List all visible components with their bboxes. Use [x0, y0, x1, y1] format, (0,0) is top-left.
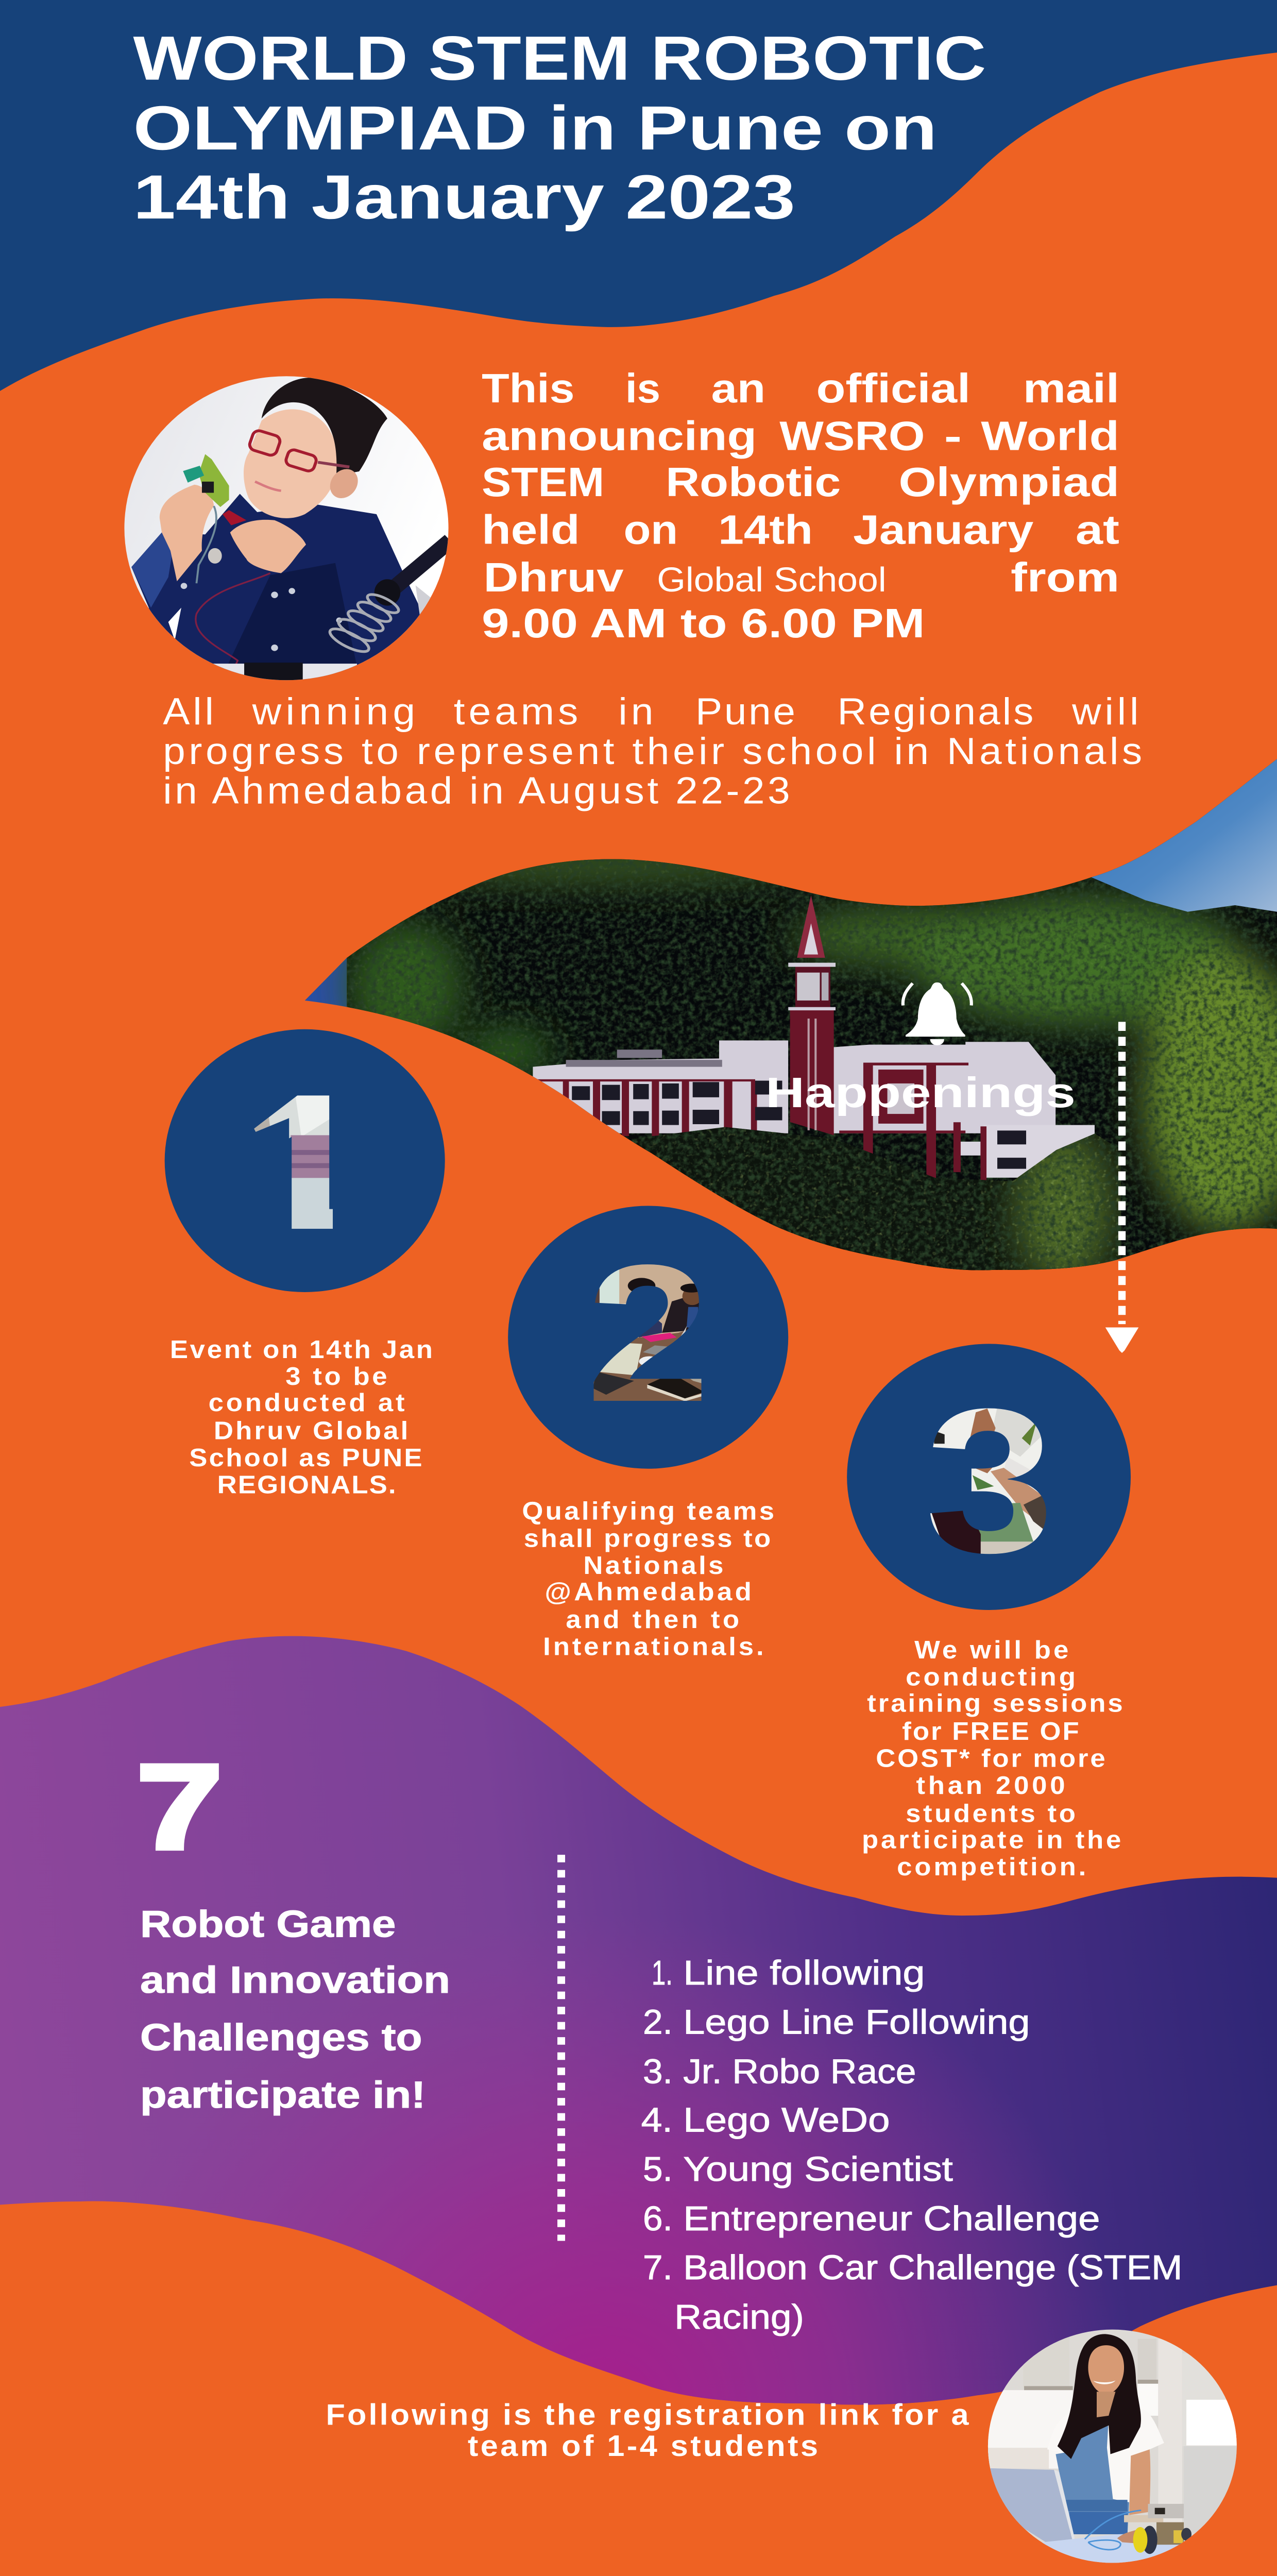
- step 1 caption: [170, 1335, 433, 1499]
- digit 3: [915, 1403, 1060, 1569]
- challenges list: 4.: [641, 2100, 673, 2139]
- sky: [1091, 759, 1277, 912]
- step 3 caption: We will be: [914, 1636, 1068, 1664]
- step 1 caption: conducted at: [209, 1388, 405, 1417]
- intro paragraph: [482, 366, 1119, 647]
- step 1 caption: Dhruv Global: [214, 1416, 408, 1445]
- step 2 caption: @Ahmedabad: [545, 1577, 752, 1606]
- winning teams paragraph: in Ahmedabad in August 22-23: [163, 770, 790, 812]
- intro paragraph: Olympiad: [898, 459, 1119, 505]
- step 1 caption: 3 to be: [285, 1362, 387, 1391]
- challenges heading: and Innovation: [140, 1959, 450, 2001]
- winning teams paragraph: in: [618, 690, 653, 733]
- winning teams paragraph: teams: [454, 690, 578, 733]
- intro paragraph: mail: [1023, 366, 1119, 412]
- challenges list: 2.: [643, 2003, 673, 2041]
- challenges heading: Challenges to: [140, 2016, 422, 2059]
- campus photo panel: [298, 756, 1277, 1286]
- step 1 caption: School as PUNE: [189, 1443, 422, 1472]
- intro paragraph: Global School: [657, 560, 887, 599]
- step 3 caption: COST* for more: [876, 1744, 1105, 1772]
- front trees: [634, 1117, 1121, 1286]
- intro paragraph: at: [1076, 507, 1119, 553]
- purple challenges wave: [0, 1636, 1277, 2405]
- winning teams paragraph: All: [163, 690, 214, 733]
- challenges list: 5.: [643, 2149, 673, 2189]
- challenges list: 3.: [643, 2052, 673, 2091]
- step 3 caption: than 2000: [916, 1771, 1065, 1800]
- blue corner sliver: [305, 958, 347, 1007]
- intro paragraph: an: [711, 366, 765, 412]
- winning teams paragraph: Regionals: [837, 690, 1033, 733]
- challenges list: Young Scientist: [683, 2149, 953, 2189]
- challenges list: 6.: [643, 2199, 673, 2238]
- step 2 caption: [522, 1497, 774, 1660]
- title: [133, 23, 986, 232]
- challenges list: 1.: [652, 1953, 673, 1992]
- challenges list: 7.: [643, 2248, 673, 2287]
- step 1 caption: Event on 14th Jan: [170, 1335, 433, 1363]
- intro paragraph: January: [853, 507, 1034, 553]
- photo: boy with circuit board: [123, 375, 452, 689]
- challenges heading: Robot Game: [140, 1903, 396, 1945]
- challenges list: Lego Line Following: [683, 2003, 1030, 2041]
- step 2 caption: Qualifying teams: [522, 1497, 774, 1525]
- step 3 caption: competition.: [897, 1852, 1086, 1881]
- winning teams paragraph: progress to represent their school in Nationals: [163, 730, 1142, 772]
- school building: [533, 1041, 1095, 1182]
- step 1 circle: [165, 1029, 445, 1292]
- challenges list: Line following: [683, 1953, 925, 1992]
- intro paragraph: World: [981, 413, 1119, 459]
- challenges list: Racing): [674, 2297, 804, 2336]
- big number 7: 7: [137, 1739, 223, 1874]
- step 3 caption: students to: [906, 1799, 1076, 1827]
- step 3 caption: participate in the: [862, 1825, 1121, 1854]
- step 2 circle: [508, 1206, 788, 1469]
- intro paragraph: held: [482, 507, 580, 553]
- winning teams paragraph: Pune: [695, 690, 795, 733]
- step 2 caption: and then to: [566, 1605, 739, 1634]
- photo: girl with robot car: [981, 2325, 1244, 2571]
- intro paragraph: announcing: [482, 413, 757, 459]
- step 2 caption: Nationals: [583, 1551, 723, 1579]
- intro paragraph: WSRO: [779, 413, 925, 459]
- winning teams paragraph: winning: [252, 690, 415, 733]
- intro paragraph: This: [482, 366, 574, 412]
- step 3 circle: [847, 1344, 1131, 1610]
- title: WORLD STEM ROBOTIC: [133, 23, 986, 93]
- registration text: Following is the registration link for a: [326, 2398, 969, 2431]
- clock tower: [788, 895, 836, 1135]
- step 3 caption: [862, 1636, 1123, 1881]
- challenges heading: [140, 1903, 450, 2116]
- dotted arrow: [1105, 1022, 1138, 1353]
- intro paragraph: official: [816, 366, 970, 412]
- registration text: team of 1-4 students: [468, 2429, 818, 2463]
- intro paragraph: from: [1011, 554, 1119, 600]
- winning teams paragraph: will: [1071, 690, 1138, 733]
- intro paragraph: is: [625, 366, 660, 412]
- title: 14th January 2023: [133, 162, 795, 232]
- title: OLYMPIAD in Pune on: [133, 93, 937, 163]
- winning teams paragraph: [163, 690, 1142, 812]
- step 3 caption: training sessions: [867, 1689, 1123, 1717]
- challenges list: Jr. Robo Race: [683, 2052, 916, 2091]
- intro paragraph: -: [944, 413, 962, 459]
- challenges list: [641, 1953, 1182, 2336]
- step 2 caption: Internationals.: [543, 1632, 764, 1660]
- happenings heading: Happenings: [765, 1069, 1076, 1117]
- challenges list: Lego WeDo: [683, 2100, 890, 2139]
- step 1 caption: REGIONALS.: [217, 1470, 396, 1499]
- intro paragraph: STEM: [482, 459, 604, 505]
- intro paragraph: Dhruv: [484, 554, 624, 600]
- dotted divider: [560, 1855, 563, 2241]
- step 3 caption: for FREE OF: [902, 1717, 1079, 1745]
- intro paragraph: Robotic: [666, 459, 841, 505]
- digit 1: [210, 1084, 385, 1241]
- challenges list: Entrepreneur Challenge: [683, 2199, 1100, 2238]
- challenges heading: participate in!: [140, 2074, 425, 2116]
- step 3 caption: conducting: [906, 1663, 1076, 1691]
- intro paragraph: on: [624, 507, 678, 553]
- registration text: [326, 2398, 969, 2463]
- challenges list: Balloon Car Challenge (STEM: [683, 2248, 1182, 2287]
- icon: bell: [903, 982, 972, 1045]
- step 2 caption: shall progress to: [524, 1524, 771, 1552]
- forested hill: [347, 756, 1277, 1281]
- top blue wave: [0, 0, 1277, 391]
- digit 2: [576, 1246, 708, 1412]
- intro paragraph: 14th: [718, 507, 813, 553]
- intro paragraph: 9.00 AM to 6.00 PM: [482, 601, 925, 647]
